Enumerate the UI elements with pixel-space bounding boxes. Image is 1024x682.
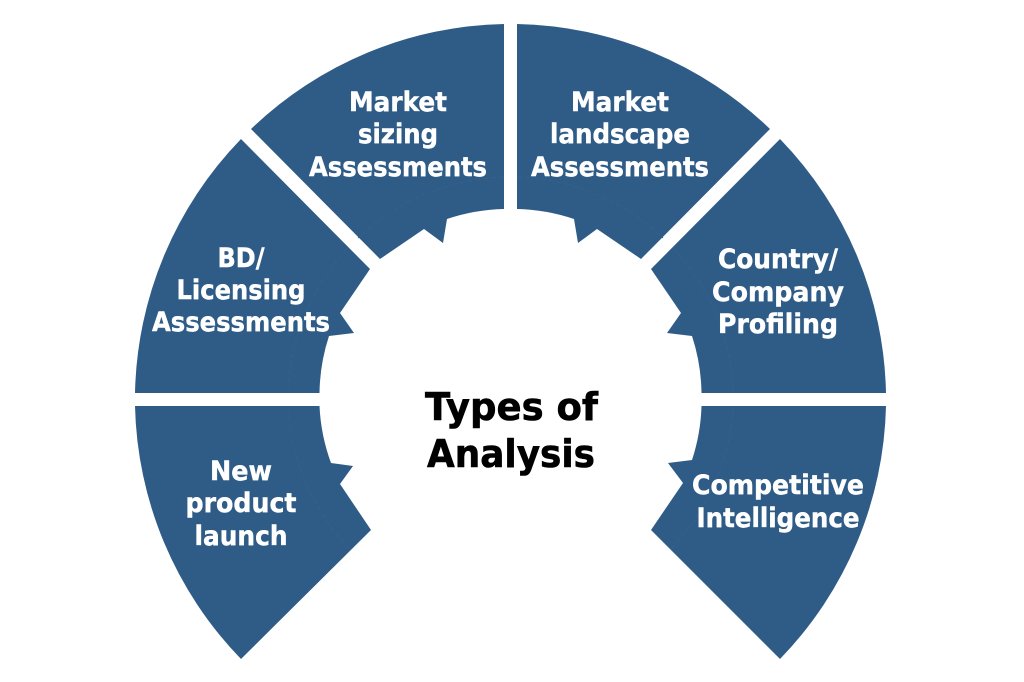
label: new product launch: New: [210, 456, 272, 487]
label: new product launch: launch: [194, 521, 288, 552]
title: types of analysis: Types of: [425, 385, 599, 430]
label: new product launch: product: [186, 488, 297, 519]
label: BD/licensing assessments: Assessments: [152, 307, 330, 338]
title: types of analysis: [425, 385, 599, 477]
panel: market sizing assessments segment: [251, 24, 504, 259]
label: market sizing assessments: Market: [349, 87, 447, 118]
panel: country/company profiling segment: [651, 139, 886, 393]
panel: market landscape assessments segment: [517, 24, 770, 259]
label: BD/licensing assessments: Licensing: [176, 275, 306, 306]
title: types of analysis: Analysis: [427, 432, 595, 477]
label: market landscape assessments: Market: [571, 87, 669, 118]
label: market landscape assessments: landscape: [550, 119, 690, 150]
label: competitive intelligence: Competitive: [692, 470, 864, 501]
label: BD/licensing assessments: [152, 243, 330, 338]
panel: BD/licensing assessments segment: [135, 139, 370, 393]
label: country/company profiling: Country/: [718, 244, 838, 275]
label: market sizing assessments: sizing: [358, 119, 438, 150]
label: market landscape assessments: [531, 87, 709, 183]
label: country/company profiling: Profiling: [718, 309, 838, 340]
panel: new product launch segment: [135, 406, 371, 659]
panel: competitive intelligence segment: [651, 406, 886, 659]
label: market sizing assessments: Assessments: [309, 152, 487, 183]
label: BD/licensing assessments: BD/: [218, 243, 265, 274]
label: new product launch: [186, 456, 297, 552]
label: competitive intelligence: [692, 470, 864, 534]
label: competitive intelligence: Intelligence: [696, 503, 860, 534]
label: market sizing assessments: [309, 87, 487, 183]
label: country/company profiling: Company: [712, 277, 844, 308]
label: country/company profiling: [712, 244, 844, 340]
label: market landscape assessments: Assessments: [531, 152, 709, 183]
